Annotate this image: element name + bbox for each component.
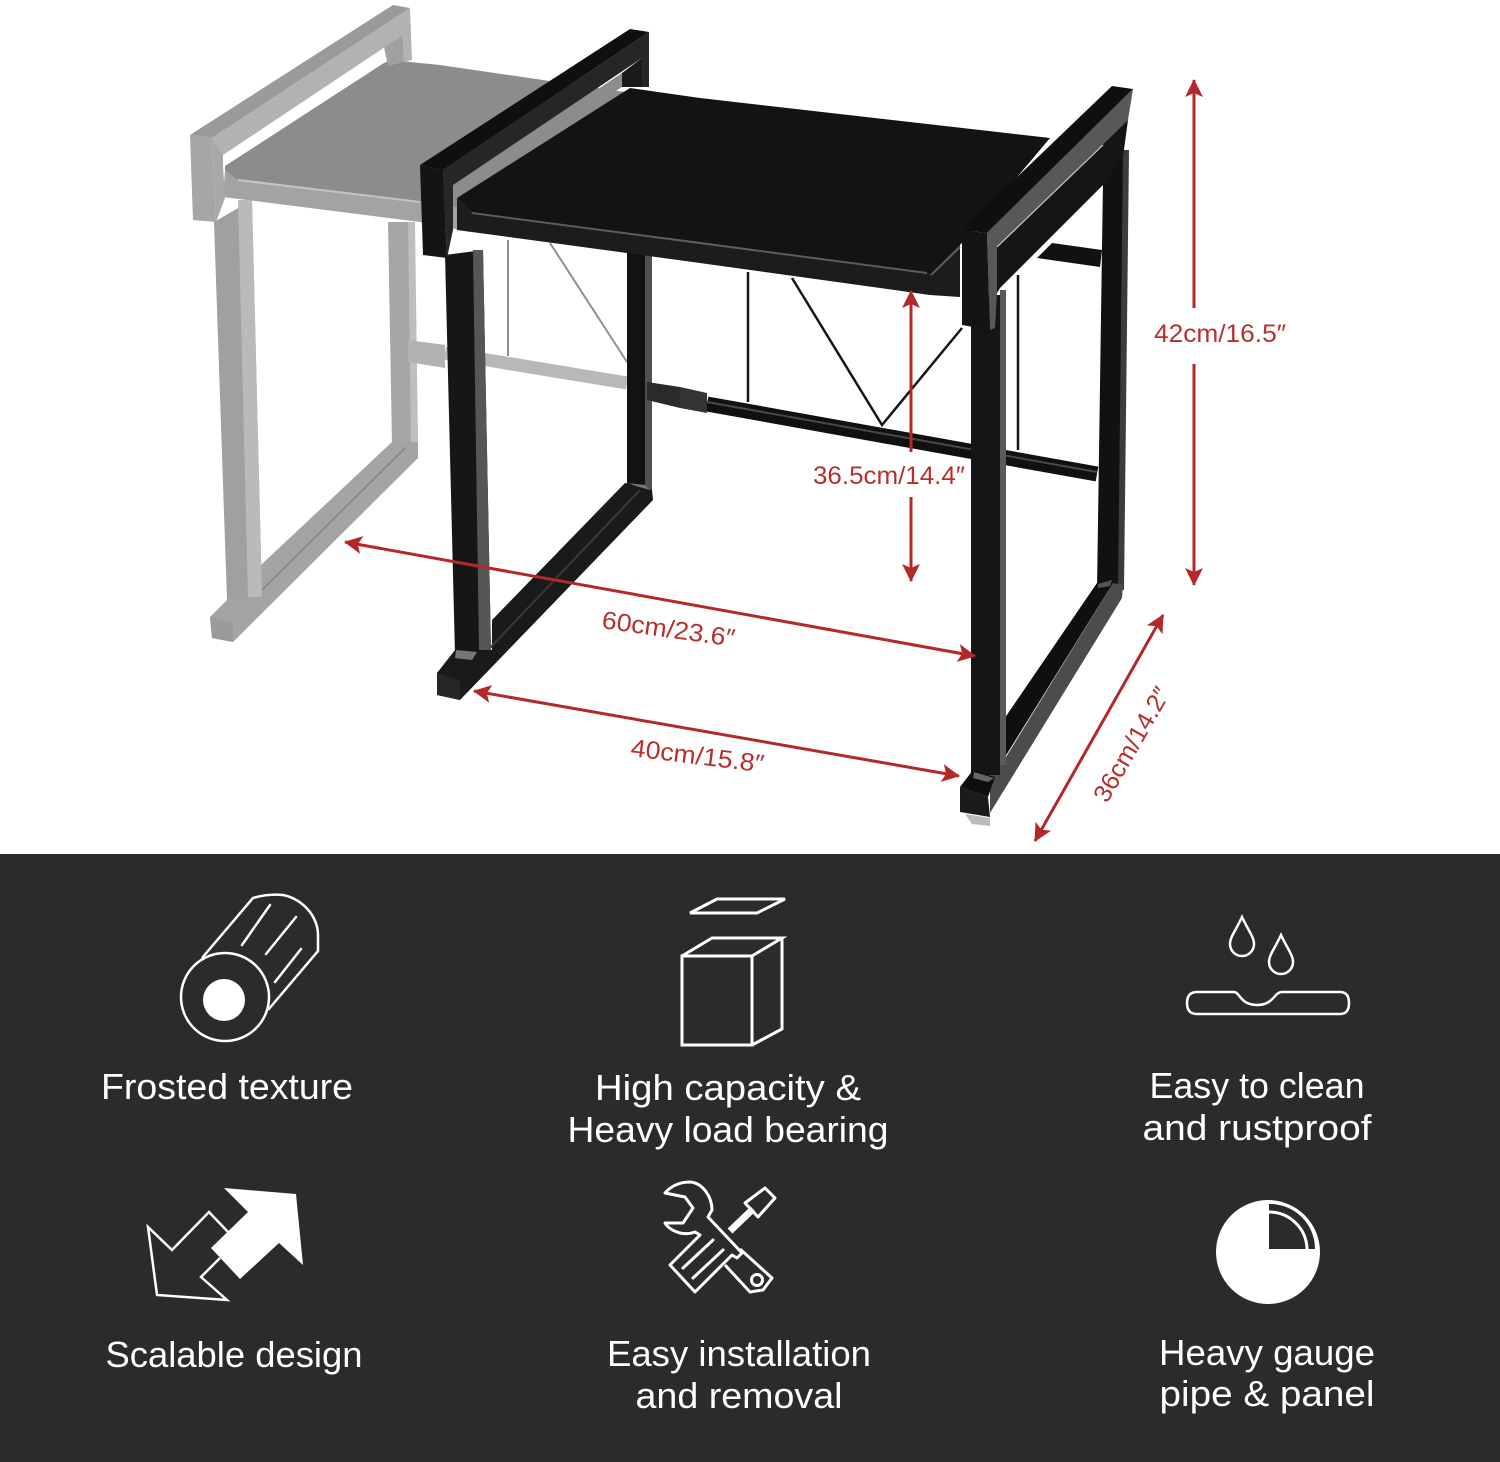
label: frosted texture: Frosted texture	[101, 1066, 353, 1107]
background	[0, 0, 1500, 854]
dimension: collapsed width	[474, 691, 959, 778]
label: easy installation: Easy installation	[607, 1333, 871, 1374]
wires	[748, 272, 1018, 450]
icon: heavy gauge pie	[1216, 1200, 1320, 1304]
left front leg	[445, 250, 491, 655]
dimension: collapsed width: 40cm/15.8″	[629, 734, 766, 778]
left rail	[455, 73, 622, 197]
label: capacity: High capacity &	[595, 1067, 861, 1108]
panel: features	[0, 854, 1500, 1462]
label: load bearing: Heavy load bearing	[568, 1109, 888, 1150]
label: pipe and panel: pipe & panel	[1160, 1373, 1374, 1414]
product: ghost rack extended position	[190, 5, 627, 642]
label: scalable design: Scalable design	[106, 1334, 362, 1375]
label: heavy gauge: Heavy gauge	[1159, 1332, 1375, 1373]
label: and removal: and removal	[636, 1375, 842, 1416]
dimension: total height: 42cm/16.5″	[1154, 320, 1286, 348]
right foot	[965, 814, 990, 826]
right rail	[962, 86, 1133, 233]
label: easy to clean: Easy to clean	[1150, 1065, 1364, 1106]
right bottom rail	[1000, 583, 1113, 765]
dimension: extended width	[345, 542, 975, 656]
dimension: inner height: 36.5cm/14.4″	[813, 462, 965, 490]
product: black rack	[420, 29, 1133, 826]
icon: water drops on surface	[1187, 917, 1349, 1014]
right leg	[971, 295, 1000, 775]
shelf	[457, 88, 1050, 275]
icon: capacity box	[682, 899, 785, 1045]
short rear bar	[1037, 243, 1102, 267]
icon: frosted texture roll	[181, 895, 318, 1041]
label: rustproof: and rustproof	[1142, 1107, 1373, 1148]
dimension: depth	[1035, 615, 1176, 841]
icon: scalable arrows	[148, 1188, 303, 1300]
dimension: depth: 36cm/14.2″	[1088, 682, 1176, 807]
icon: wrench and screwdriver	[665, 1182, 775, 1292]
dimension: extended width: 60cm/23.6″	[600, 606, 737, 653]
back legs	[627, 250, 651, 492]
tension rod	[707, 404, 1097, 474]
left bottom rail	[437, 483, 653, 700]
